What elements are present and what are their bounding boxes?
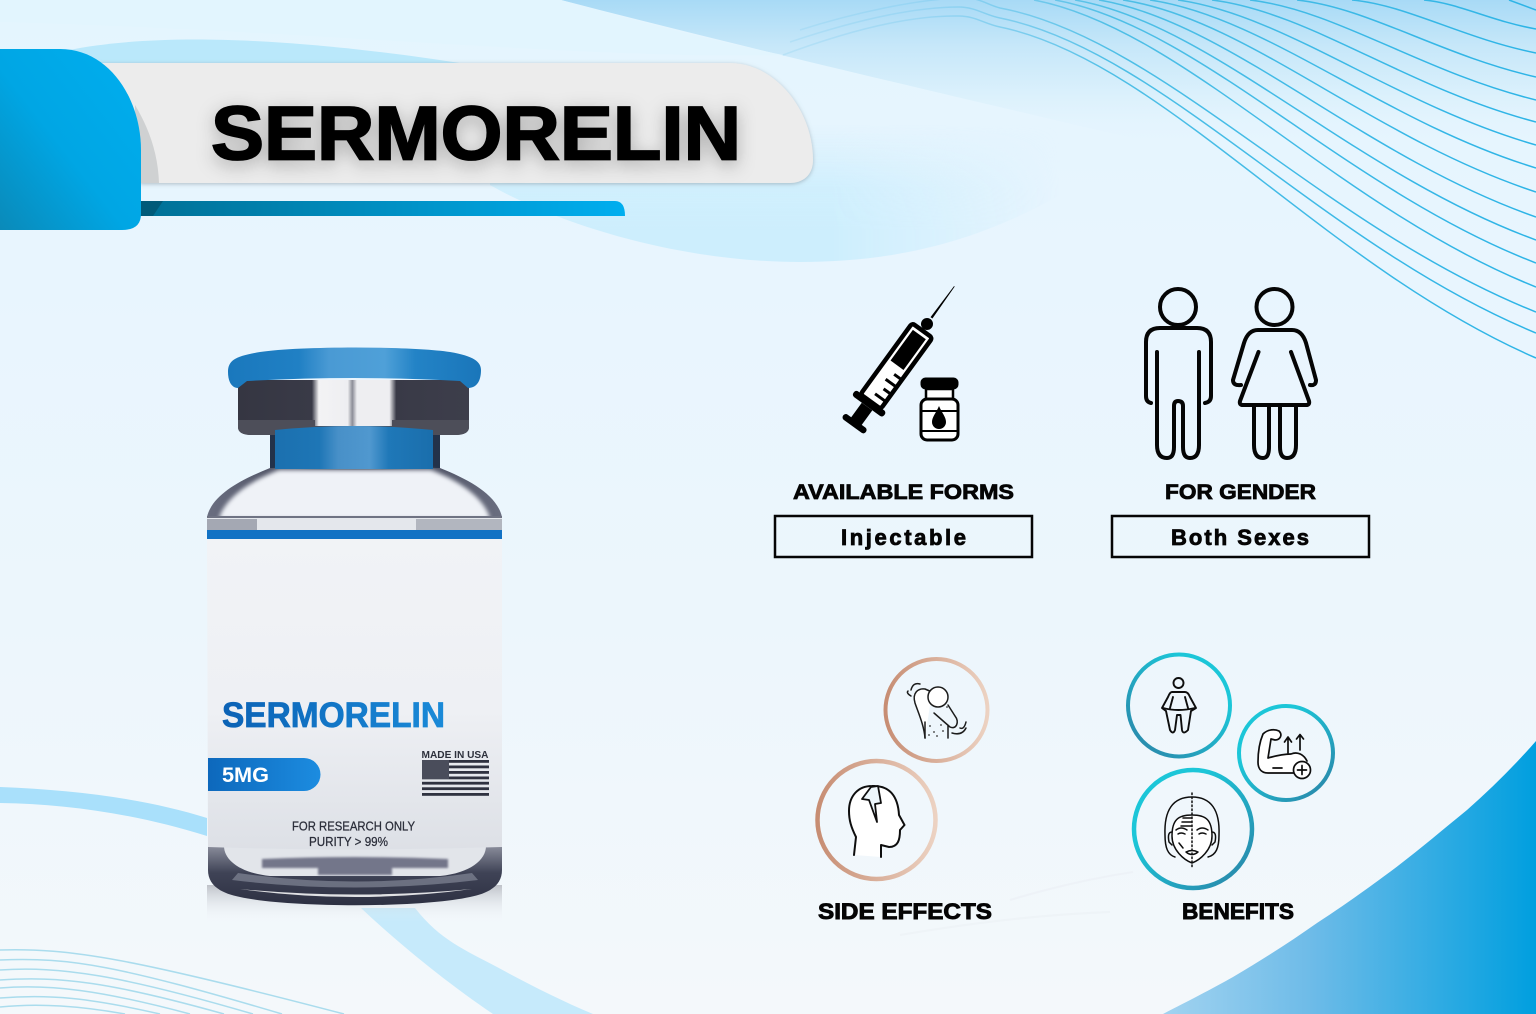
vial bottom glass [208, 846, 502, 905]
title: SERMORELIN [211, 92, 741, 176]
forms label: AVAILABLE FORMS [793, 480, 1014, 504]
icon: small vial [920, 378, 958, 440]
inner base light [224, 846, 486, 876]
decorative curved lines bottom left [0, 950, 344, 1014]
shoulder inner glass [219, 470, 490, 519]
purity note: PURITY > 99% [309, 835, 388, 849]
inner base band [232, 873, 478, 888]
panel: benefits [1128, 654, 1333, 924]
underline bar [135, 201, 625, 216]
metal crimp [238, 380, 469, 435]
dose text: 5MG [222, 764, 269, 787]
forms value: Injectable [841, 525, 966, 550]
icon: man [1146, 289, 1211, 458]
gender value box [1112, 516, 1369, 557]
benefits label: BENEFITS [1182, 899, 1294, 924]
glass neck [270, 425, 440, 471]
bar shadow [135, 201, 163, 216]
icon: skin irritation [886, 659, 988, 761]
title banner [0, 49, 813, 230]
label brand: SERMORELIN [222, 696, 445, 735]
side effects label: SIDE EFFECTS [818, 899, 992, 924]
panel: for gender [1112, 289, 1369, 557]
banner plate [100, 63, 813, 183]
dose pill [208, 758, 321, 791]
base highlight [240, 889, 472, 897]
icon: syringe [837, 275, 970, 438]
forms value box [775, 516, 1032, 557]
icon: weight loss [1128, 654, 1230, 756]
icon: headache [818, 761, 936, 879]
icon: face aging [1134, 770, 1252, 888]
shoulder band [207, 516, 502, 531]
gender value: Both Sexes [1171, 525, 1309, 550]
blue cap [228, 348, 481, 388]
panel: side effects [818, 659, 992, 924]
label stripe [207, 530, 502, 539]
icon: woman [1233, 289, 1316, 458]
icon: usa flag [422, 760, 489, 796]
tab shadow [135, 105, 159, 183]
inner base shade [262, 857, 448, 875]
decorative curved lines top right [783, 0, 1536, 358]
vial reflection [207, 885, 502, 922]
gender label: FOR GENDER [1165, 480, 1316, 504]
panel: available forms [775, 275, 1032, 557]
neck blue top [275, 426, 433, 469]
made in usa: MADE IN USA [422, 749, 489, 761]
blue tab [0, 49, 141, 230]
crimp shadow [238, 420, 469, 435]
vial [207, 348, 502, 922]
glass shoulder [207, 468, 502, 532]
white label [207, 539, 502, 850]
research note: FOR RESEARCH ONLY [292, 820, 416, 834]
icon: muscle growth [1239, 706, 1333, 800]
